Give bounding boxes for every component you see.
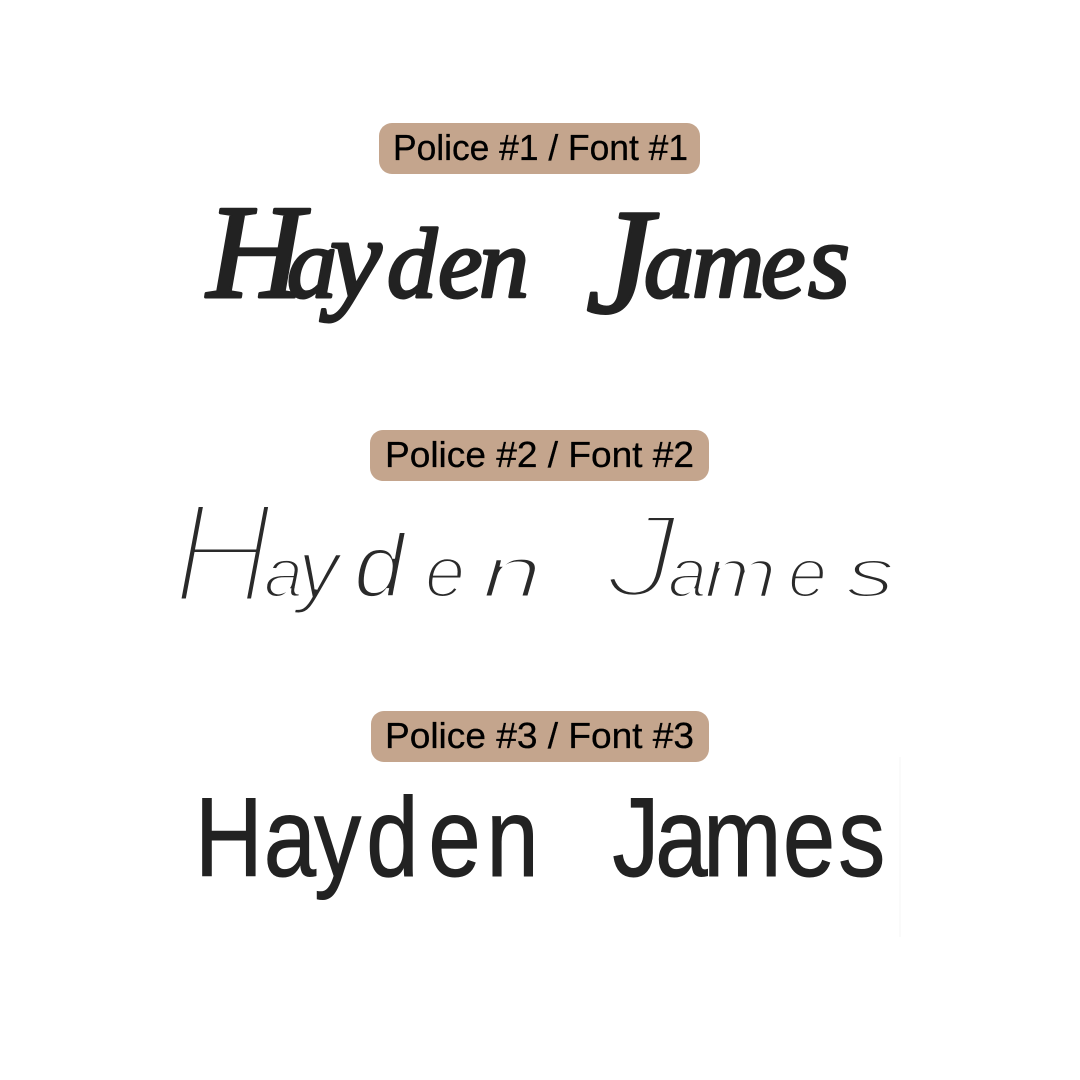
name sample: font 2: H (172, 471, 274, 635)
label pill: font 1: Police #1 / Font #1 (393, 127, 688, 168)
name sample: font 1: H (205, 178, 310, 326)
name sample: font 3: y (314, 774, 361, 900)
name sample: font 2: s (846, 535, 895, 613)
name sample: font 2: d (354, 517, 407, 617)
name sample: font 1: y (320, 195, 382, 323)
name sample: font 2: e (425, 533, 465, 613)
name sample: font 2: m (704, 533, 777, 612)
name sample: font 1: s (808, 202, 850, 321)
name sample: font 3: a (655, 774, 708, 900)
name sample: font 1: a (287, 208, 337, 319)
name sample: font 1: d (387, 208, 438, 319)
name sample: font 3: s (838, 774, 885, 900)
name sample: font 1: e (761, 208, 805, 319)
name sample: font 3: e (783, 774, 835, 900)
faint image edge (900, 757, 901, 937)
label pill: font 3: Police #3 / Font #3 (385, 715, 694, 756)
label pill: font 2: Police #2 / Font #2 (385, 434, 694, 475)
name sample: font 3: e (428, 774, 481, 900)
name sample: font 3: m (703, 774, 781, 900)
name sample: font 3: H (195, 774, 263, 900)
panel: font 1 (205, 123, 850, 345)
panel: font 2 (172, 430, 895, 635)
name sample: font 2: J (605, 489, 680, 623)
name sample: font 2: e (788, 534, 827, 612)
name sample: font 1: J (586, 179, 659, 345)
name sample: font 2: n (482, 533, 542, 613)
name sample: font 2 (172, 471, 895, 635)
name sample: font 1: e (438, 208, 482, 319)
name sample: font 2: a (668, 534, 707, 612)
name sample: font 2: y (293, 524, 344, 615)
name sample: font 1: n (479, 208, 529, 319)
panel: font 3 (195, 711, 885, 900)
name sample: font 3: J (612, 774, 659, 900)
name sample: font 3: a (264, 774, 317, 900)
name sample: font 3: n (486, 774, 539, 900)
name sample: font 1: m (692, 208, 764, 319)
name sample: font 2: a (264, 534, 303, 612)
name sample: font 1: a (644, 208, 694, 319)
name sample: font 3: d (366, 774, 419, 900)
